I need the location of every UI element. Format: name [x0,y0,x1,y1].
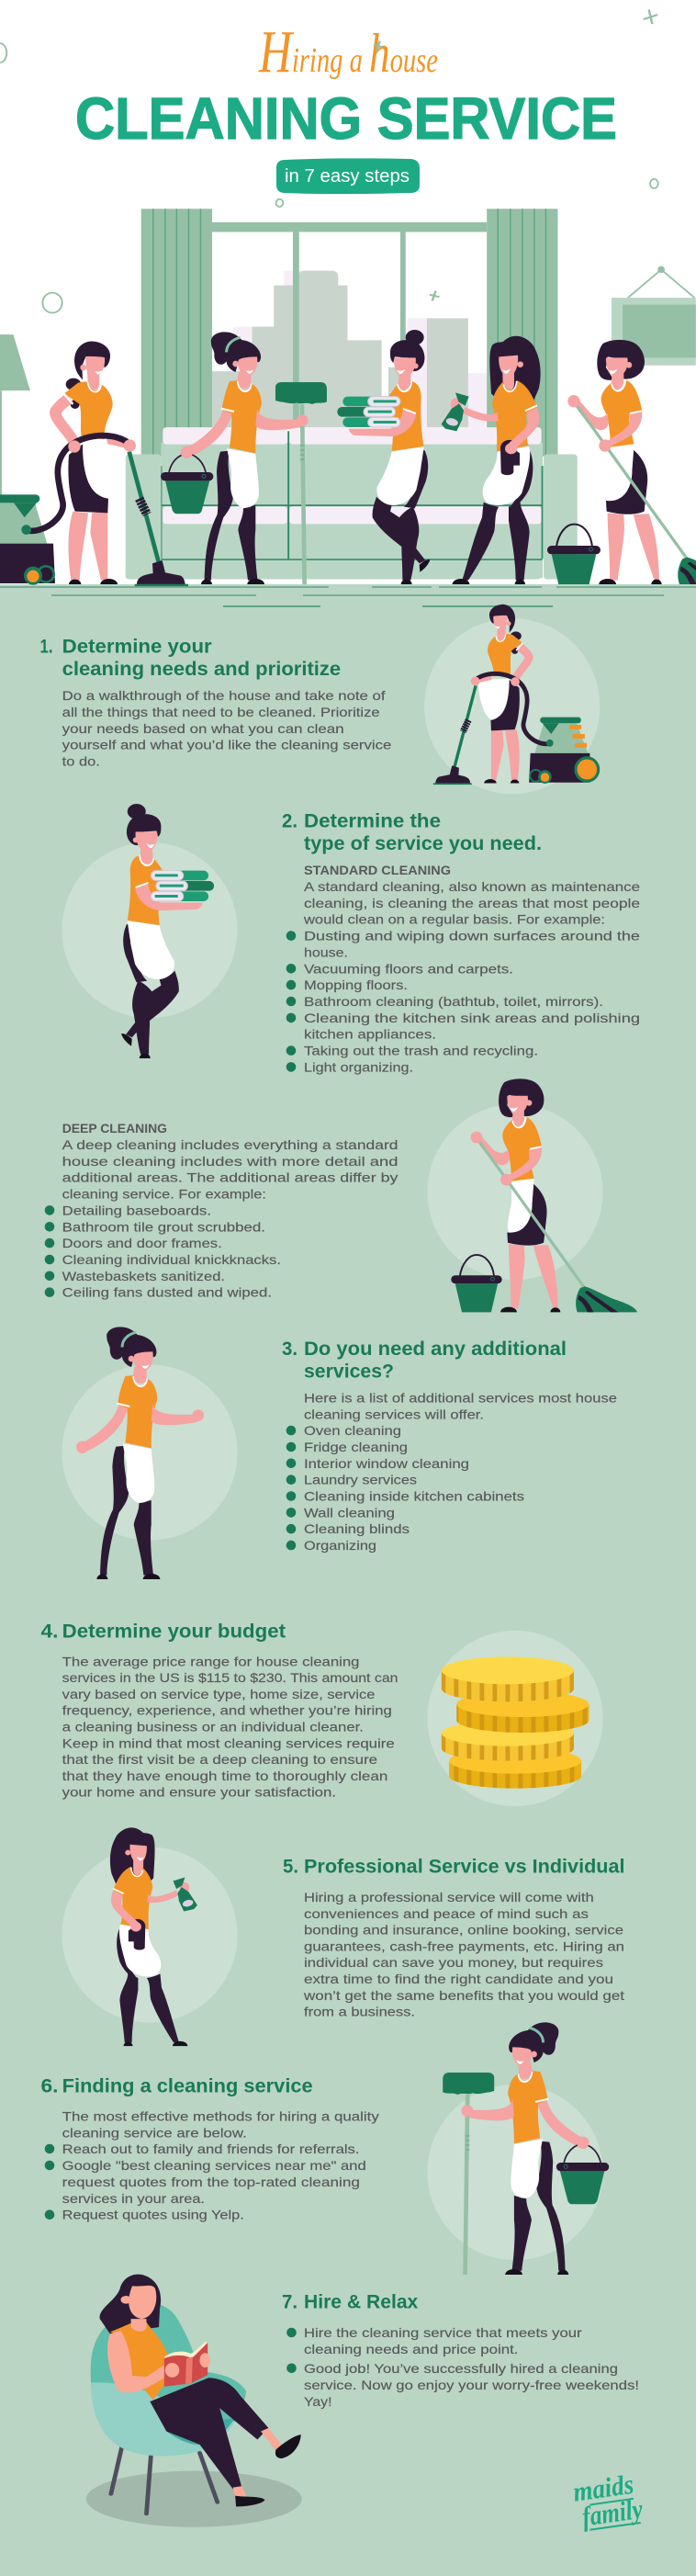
step 6 text and list: cleaning service are below. [62,2125,247,2140]
deep cleaning text and list: Ceiling fans dusted and wiped. [62,1285,272,1300]
panel: step 1 [40,604,600,794]
decorative circles and crosses [0,10,658,313]
step 4 body text: Keep in mind that most cleaning services require [62,1735,395,1750]
step 4 heading: 4. [40,1621,59,1642]
step 3 heading: services? [304,1361,394,1382]
step 1 heading [40,637,341,680]
step 1 body text: all the things that need to be cleaned. Prioritize [62,705,380,719]
deep cleaning text and list: cleaning service. For example: [62,1187,266,1202]
standard cleaning text and list: house. [304,944,348,959]
step 7 list: Good job! You’ve successfully hired a cleaning [304,2361,618,2376]
panel: step 6 [40,2022,609,2275]
step 3 text and list: Oven cleaning [304,1423,401,1438]
deep cleaning text and list: additional areas. The additional areas differ by [62,1170,398,1185]
step 5 body text: conveniences and peace of mind such as [304,1906,589,1921]
deep cleaning illustration: maid with mop and bucket [427,1079,637,1312]
step 1 heading: cleaning needs and prioritize [62,659,341,680]
sofa [126,427,578,580]
step 4 body text: vary based on service type, home size, service [62,1687,376,1701]
standard cleaning text and list: cleaning, is cleaning the areas that most people [304,896,640,910]
standard cleaning text and list: Cleaning the kitchen sink areas and polishing [304,1011,640,1025]
step 3 text and list: Wall cleaning [304,1505,395,1520]
step 5 body text: Hiring a professional service will come with [304,1890,594,1904]
standard cleaning text and list: A standard cleaning, also known as maintenance [304,879,640,894]
step 3 text and list: Cleaning inside kitchen cabinets [304,1488,524,1503]
step 1 body text: Do a walkthrough of the house and take note of [62,688,386,703]
step 4 body text: The average price range for house cleaning [62,1654,359,1668]
standard cleaning text and list: would clean on a regular basis. For example: [303,912,605,927]
script heading: Hiring a house [258,18,438,85]
step 6 text and list: request quotes from the top-rated cleaning [62,2175,360,2189]
step 7 heading: Hire & Relax [304,2292,419,2313]
step 5 body text: guarantees, cash-free payments, etc. Hiring an [304,1938,624,1953]
deep cleaning text and list: Wastebaskets sanitized. [62,1269,225,1283]
step 7 list: Yay! [304,2394,332,2409]
step 4 body text: that they have enough time to thoroughly clean [62,1768,387,1783]
step 3 text and list: Laundry services [304,1473,417,1487]
standard cleaning text and list: Taking out the trash and recycling. [304,1044,538,1058]
step 1 heading: Determine your [62,637,212,658]
deep cleaning text and list: Doors and door frames. [62,1236,222,1250]
curtains [141,209,558,457]
step 6 text and list [45,2108,379,2222]
step 4 body text: that the first visit be a deep cleaning to ensure [62,1752,377,1767]
panel: step 4 [40,1621,603,1806]
step 1 body text [62,688,392,768]
step 4 body text: frequency, experience, and whether you’re hiring [62,1703,392,1718]
step 2 heading [282,811,542,854]
step 4 illustration: stack of coins [427,1631,603,1806]
standard cleaning text and list: Dusting and wiping down surfaces around the [304,929,640,943]
step 4 body text: a cleaning business or an individual cleaner. [62,1720,364,1734]
deep cleaning text and list [45,1137,398,1300]
step 6 text and list: Request quotes using Yelp. [62,2208,244,2222]
lamp [0,334,30,499]
step 5 illustration: maid with spray bottle [62,1827,238,2046]
badge: in 7 easy steps: in 7 easy steps [285,166,410,186]
standard cleaning text and list: Bathroom cleaning (bathtub, toilet, mirrors). [304,994,603,1009]
step 5 body text: won’t get the same benefits that you would get [303,1988,624,2003]
step 3 illustration: maid with open arms [62,1327,238,1579]
step 2 illustration: maid carrying towels [62,804,238,1058]
standard cleaning text and list: Vacuuming floors and carpets. [304,961,513,976]
step 4 body text [62,1654,398,1800]
deep cleaning text and list: Detailing baseboards. [62,1203,211,1217]
logo: maids family: family [580,2494,645,2533]
step 3 text and list: Cleaning blinds [304,1521,410,1536]
step 1 body text: to do. [62,753,100,768]
step 7 list: Hire the cleaning service that meets your [304,2325,582,2340]
deep cleaning text and list: A deep cleaning includes everything a standard [62,1137,398,1152]
window frame [212,222,487,429]
deep cleaning text and list: Bathroom tile grout scrubbed. [62,1219,265,1234]
step 3 heading: Do you need any additional [304,1339,567,1360]
step 1 body text: yourself and what you’d like the cleaning service [62,738,392,752]
hero title group [75,18,617,194]
logo: maids family: maids [571,2469,635,2508]
step 3 text and list: Fridge cleaning [304,1440,408,1454]
step 3 text and list: Organizing [304,1538,376,1553]
step 5 body text [303,1890,624,2019]
standard cleaning text and list: kitchen appliances. [304,1027,436,1042]
step 5 body text: individual can save you money, but requires [304,1955,603,1970]
panel: step 3 [62,1327,617,1579]
step 2 heading: 2. [282,811,297,832]
step 3 text and list: cleaning services will offer. [304,1407,484,1421]
hero room scene [0,10,696,580]
step 7 heading: 7. [282,2292,297,2313]
step 4 body text: services in the US is $115 to $230. This amount can [62,1670,398,1685]
step 6 text and list: services in your area. [62,2191,205,2206]
step 3 text and list: Interior window cleaning [304,1456,469,1471]
step 3 text and list: Here is a list of additional services most house [304,1390,617,1405]
step 3 text and list [286,1390,617,1553]
hero: white backdrop [0,0,696,584]
step 3 heading [282,1339,567,1382]
step 4 body text: your home and ensure your satisfaction. [62,1785,336,1800]
step 7 illustration: woman reading in armchair [86,2275,302,2527]
step 6 text and list: Reach out to family and friends for referrals. [62,2141,359,2156]
step 5 body text: extra time to find the right candidate and you [304,1972,613,1986]
panel: step 2 standard cleaning [62,804,640,1074]
step 5 body text: from a business. [304,2005,415,2019]
step 3 heading: 3. [282,1339,297,1360]
step 1 heading: 1. [40,637,53,658]
deep cleaning text and list: Cleaning individual knickknacks. [62,1252,281,1267]
step 6 heading: Finding a cleaning service [62,2075,313,2096]
step 7 list: cleaning needs and price point. [304,2342,518,2356]
step 6 text and list: Google "best cleaning services near me" and [62,2158,366,2173]
deep cleaning subheading: DEEP CLEANING [62,1121,167,1135]
badge: in 7 easy steps [276,158,420,194]
step 2 heading: Determine the [304,811,441,832]
panel: step 5 [62,1827,624,2046]
step 6 heading: 6. [40,2075,59,2096]
step 1 illustration: maid with vacuum [424,604,600,794]
standard cleaning subheading: STANDARD CLEANING [304,863,451,877]
panel: deep cleaning [45,1079,637,1312]
standard cleaning text and list: Mopping floors. [304,977,408,992]
step 7 list [286,2325,639,2409]
step 5 heading: 5. [283,1856,298,1877]
deep cleaning text and list: house cleaning includes with more detail and [62,1154,398,1169]
hero figures: five maids [0,330,696,585]
standard cleaning text and list: Light organizing. [304,1059,413,1074]
step 4 heading: Determine your budget [62,1621,286,1642]
city skyline in window [212,271,487,427]
step 1 body text: your needs based on what you can clean [62,721,344,736]
step 7 list: service. Now go enjoy your worry-free weekends! [304,2378,639,2392]
logo: maids family [571,2469,645,2533]
step 6 text and list: The most effective methods for hiring a quality [62,2108,379,2123]
standard cleaning text and list [286,879,640,1074]
step 6 illustration: maid with mop and bucket [427,2022,609,2275]
step 2 heading: type of service you need. [304,833,542,854]
wall picture [612,266,696,366]
panel: step 7 [86,2275,639,2527]
step 5 body text: bonding and insurance, online booking, service [304,1923,623,1938]
floor lines [0,587,696,595]
step 5 heading: Professional Service vs Individual [304,1856,624,1877]
main title: CLEANING SERVICE [75,85,617,152]
